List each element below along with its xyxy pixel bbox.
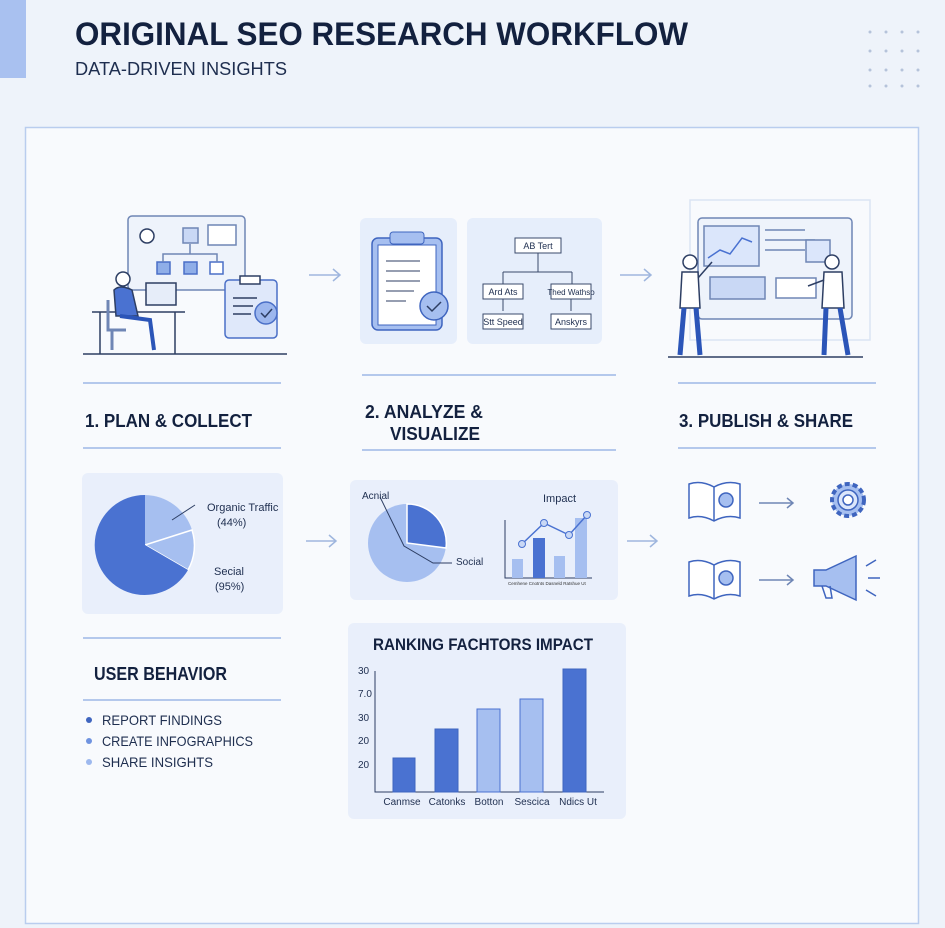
pie chart card 1: Organic Traffic	[207, 502, 279, 514]
arrow 4	[627, 535, 657, 547]
pie chart card 1	[82, 473, 283, 614]
heading step 2: VISUALIZE	[390, 424, 480, 444]
illustration: person at desk	[83, 216, 287, 354]
ranking factors bar chart: 30	[358, 666, 370, 677]
heading step 1: 1. PLAN & COLLECT	[85, 411, 252, 431]
flowchart card	[467, 218, 602, 344]
heading step 3: 3. PUBLISH & SHARE	[679, 411, 853, 431]
bullet list	[86, 712, 253, 770]
heading step 2: 2. ANALYZE &	[365, 402, 483, 422]
flowchart card: Ard Ats	[488, 287, 518, 297]
pie chart card 1: (44%)	[217, 517, 246, 529]
ranking factors bar chart	[348, 623, 626, 819]
title: ORIGINAL SEO RESEARCH WORKFLOW	[75, 16, 689, 52]
flowchart card: Anskyrs	[555, 317, 587, 327]
pie chart card 1: Secial	[214, 566, 244, 578]
ranking factors bar chart: 7.0	[358, 689, 372, 700]
bullet list: SHARE INSIGHTS	[102, 754, 213, 770]
arrow 3	[306, 535, 336, 547]
publish icons	[689, 483, 880, 600]
ranking factors bar chart: Catonks	[429, 797, 465, 808]
bullet list: REPORT FINDINGS	[102, 712, 222, 728]
decorative dots	[868, 30, 920, 88]
ranking factors bar chart: RANKING FACHTORS IMPACT	[373, 635, 594, 654]
pie chart card 1: (95%)	[215, 581, 244, 593]
ranking factors bar chart: Canmse	[383, 797, 421, 808]
flowchart card: Stt Speed	[483, 317, 523, 327]
arrow 1	[309, 269, 340, 281]
step lines	[83, 375, 876, 700]
ranking factors bar chart: 20	[358, 760, 370, 771]
ranking factors bar chart: 30	[358, 713, 370, 724]
illustration: presenters	[668, 200, 870, 357]
flowchart card: AB Tert	[523, 241, 553, 251]
mixed chart card	[350, 480, 618, 600]
heading: user behavior: USER BEHAVIOR	[94, 664, 227, 684]
mixed chart card: Acnial	[362, 491, 389, 502]
ranking factors bar chart: 20	[358, 736, 370, 747]
mixed chart card: Impact	[543, 493, 576, 505]
accent bar	[0, 0, 26, 78]
subtitle: DATA-DRIVEN INSIGHTS	[75, 59, 287, 79]
arrow 2	[620, 269, 651, 281]
ranking factors bar chart: Ndics Ut	[559, 797, 597, 808]
ranking factors bar chart: Botton	[475, 797, 503, 808]
flowchart card: Thed Wathso	[547, 288, 595, 297]
clipboard card	[360, 218, 457, 344]
mixed chart card: Social	[456, 557, 483, 568]
bullet list: CREATE INFOGRAPHICS	[102, 733, 253, 749]
mixed chart card: Cemhene Cnotnts Dasneld Ratshue Ut	[508, 581, 587, 586]
ranking factors bar chart: Sescica	[514, 797, 550, 808]
